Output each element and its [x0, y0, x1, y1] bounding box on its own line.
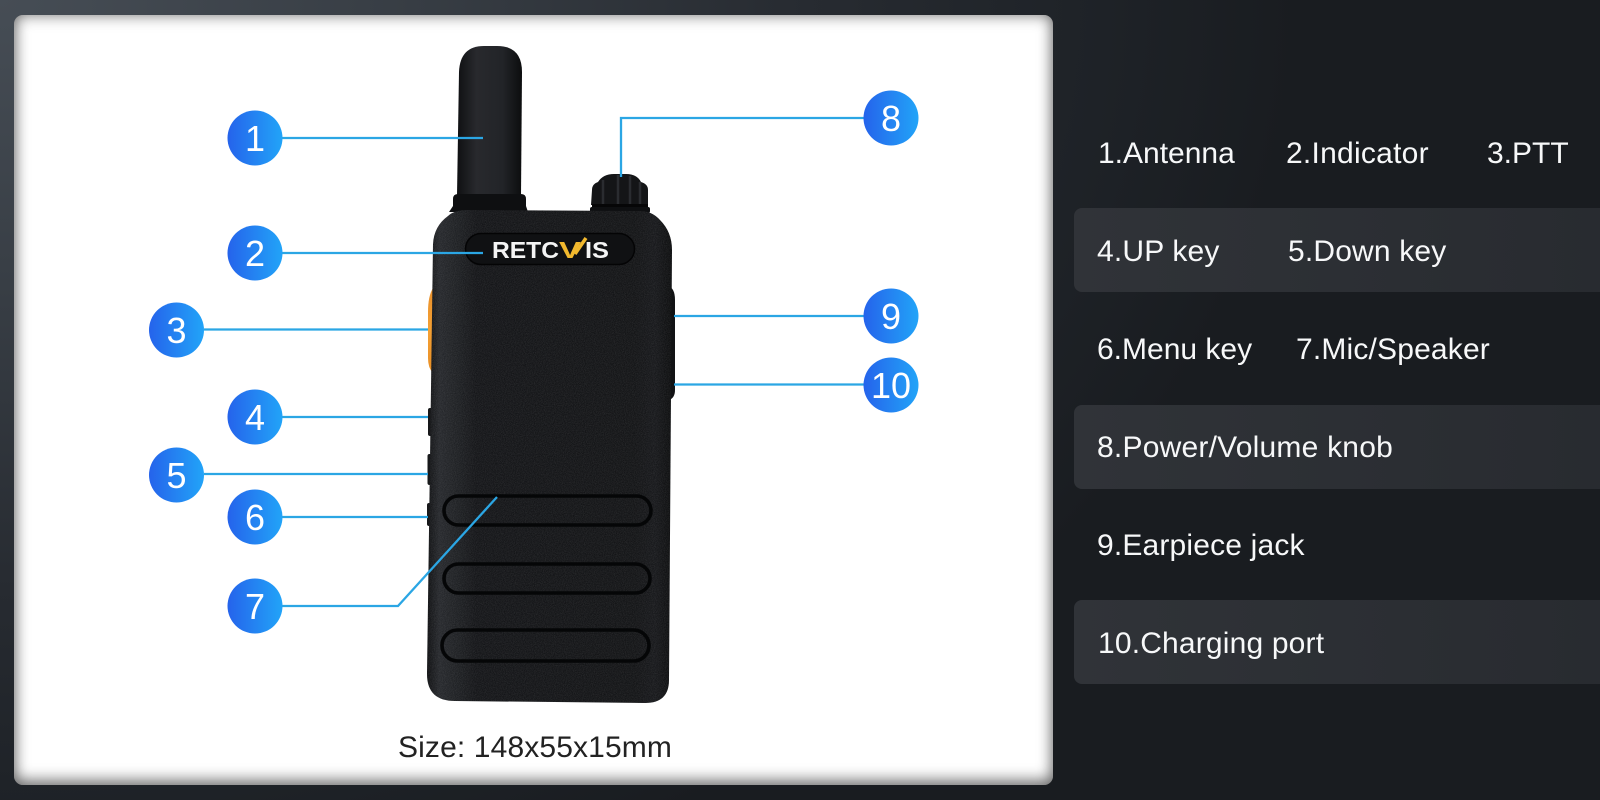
- size caption: Size: 148x55x15mm: [398, 731, 672, 764]
- badge 10: 10: [871, 365, 911, 406]
- badge 8: [864, 90, 918, 146]
- badge 2: [228, 226, 282, 280]
- badge 3: 3: [166, 310, 187, 351]
- walkie-talkie: [427, 46, 675, 703]
- badge 7: [228, 578, 282, 634]
- row background: 4 and 5: [1074, 208, 1600, 292]
- row background: 10: [1074, 600, 1600, 684]
- number badges: [149, 90, 918, 634]
- badge 2: 2: [245, 233, 265, 274]
- legend: 9.Earpiece jack: 9.Earpiece jack: [1097, 529, 1305, 562]
- side buttons: [427, 286, 675, 526]
- brand logo: [466, 234, 634, 264]
- badge 3: [149, 302, 204, 358]
- speaker slots: [442, 496, 651, 661]
- badge 1: [228, 110, 282, 166]
- badge 4: 4: [245, 397, 265, 438]
- brand logo: V: [559, 237, 582, 263]
- badge 9: 9: [881, 296, 901, 337]
- badge 7: 7: [245, 586, 265, 627]
- legend: 1.Antenna: 1.Antenna: [1098, 137, 1235, 170]
- badge 6: [228, 490, 282, 544]
- badge 10: [864, 358, 918, 412]
- badge 5: 5: [166, 455, 187, 496]
- power/volume knob: [590, 174, 650, 213]
- badge 5: [149, 448, 204, 502]
- legend: 10.Charging port: 10.Charging port: [1098, 627, 1324, 660]
- row background: 8: [1074, 405, 1600, 489]
- legend: 2.Indicator: 2.Indicator: [1286, 137, 1429, 170]
- badge 9: [864, 288, 918, 344]
- badge 1: 1: [245, 118, 265, 159]
- legend: 6.Menu key: 6.Menu key: [1097, 333, 1252, 366]
- callout lines: [204, 118, 864, 606]
- badge 8: 8: [881, 98, 901, 139]
- antenna: [449, 46, 528, 212]
- legend: 8.Power/Volume knob: 8.Power/Volume knob: [1097, 431, 1393, 464]
- badge 6: 6: [245, 497, 265, 538]
- legend: 5.Down key: 5.Down key: [1288, 235, 1446, 268]
- brand logo: RETC: [492, 237, 559, 263]
- legend: 3.PTT: 3.PTT: [1487, 137, 1569, 170]
- badge 4: [228, 390, 282, 444]
- legend: 4.UP key: 4.UP key: [1097, 235, 1220, 268]
- radio body: [427, 210, 672, 703]
- panel: product photo: [14, 15, 1053, 785]
- legend: 7.Mic/Speaker: 7.Mic/Speaker: [1296, 333, 1490, 366]
- brand logo: IS: [585, 237, 609, 263]
